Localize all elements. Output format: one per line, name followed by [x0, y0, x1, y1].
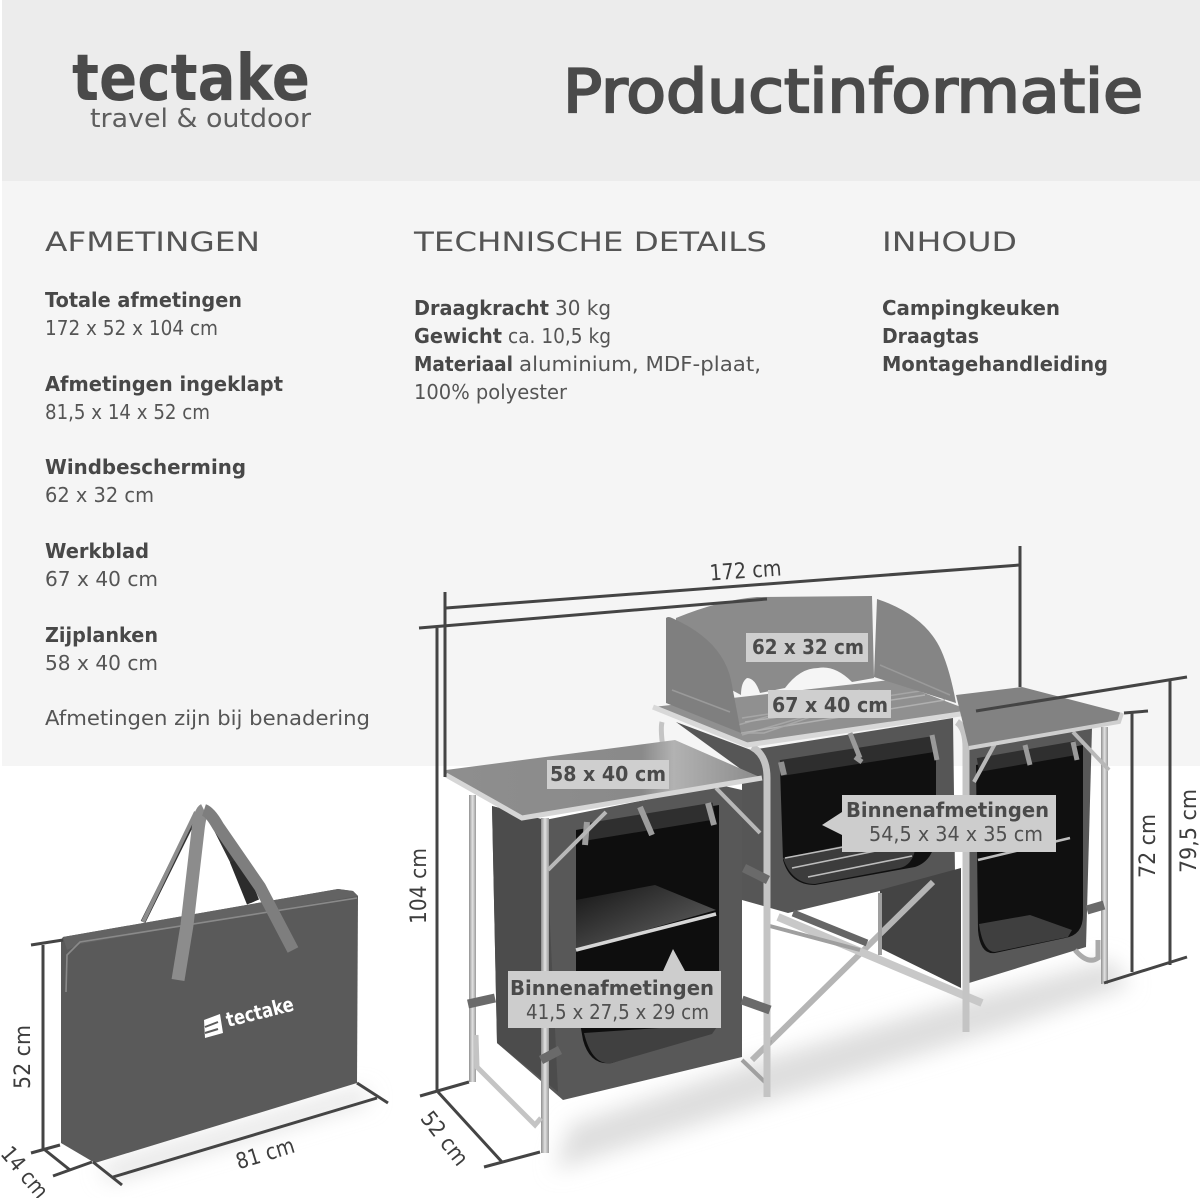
bag top side [63, 889, 358, 950]
text block: dimensions list [45, 288, 370, 730]
handle front [143, 810, 293, 980]
title: Productinformatie [563, 57, 1143, 127]
dimension label: bag height 52 cm: 52 cm [11, 1025, 36, 1089]
information panel background [2, 181, 1200, 766]
dimension label: 104 cm: 104 cm [407, 848, 432, 924]
product illustration: carrying bag [61, 810, 372, 1180]
dimension label: 172 cm: 172 cm [709, 557, 782, 586]
zipper [66, 898, 357, 992]
text block: technical details [414, 296, 761, 404]
text block: dimensions list: 81,5 x 14 x 52 cm [45, 400, 210, 424]
callout: 58 x 40 cm: 58 x 40 cm [550, 762, 666, 786]
text block: dimensions list: Afmetingen ingeklapt [45, 372, 283, 396]
bag shadow [100, 1090, 372, 1180]
text block: contents [882, 296, 1108, 376]
frame poles and cross legs [468, 722, 1109, 1153]
text block: dimensions list: 67 x 40 cm [45, 567, 158, 591]
dimension lines: kitchen [419, 546, 1187, 1167]
text block: technical details: 100% polyester [414, 380, 568, 404]
callout: center compartment inner dimensions [822, 795, 1056, 852]
section: inhoud [882, 227, 1108, 376]
text block: dimensions list: 172 x 52 x 104 cm [45, 316, 218, 340]
dimension label: bag width 81 cm: 81 cm [233, 1134, 298, 1175]
text block: technical details: Draagkracht [414, 296, 549, 320]
floor shadow [555, 960, 1130, 1170]
text block: technical details: aluminium, MDF-plaat, [519, 352, 761, 376]
dimension label: kitchen depth 52 cm: 52 cm [415, 1107, 473, 1171]
right cabinet [880, 728, 1092, 988]
left cabinet [492, 785, 742, 1100]
bag logo: tectake [223, 992, 296, 1032]
section: technische details [413, 227, 767, 404]
callout: center compartment inner dimensions: 54,5 x 34 x 35 cm [869, 822, 1043, 846]
heading: afmetingen: AFMETINGEN [45, 227, 260, 258]
callout: 67 x 40 cm: 67 x 40 cm [772, 693, 888, 717]
bag logo [204, 992, 296, 1038]
right side shelf [956, 687, 1122, 748]
handle back [143, 813, 253, 922]
callout: left compartment inner dimensions: Binnenafmetingen [510, 976, 714, 1000]
brand logo: travel & outdoor [90, 104, 311, 134]
text block: dimensions list: 58 x 40 cm [45, 651, 158, 675]
dimension label: 72 cm: 72 cm [1136, 814, 1161, 878]
center cabinet [676, 718, 955, 913]
text block: contents: Campingkeuken [882, 296, 1060, 320]
bag body [61, 889, 358, 1163]
text block: dimensions list: Zijplanken [45, 623, 158, 647]
callout: left compartment inner dimensions: 41,5 x 27,5 x 29 cm [526, 1000, 709, 1024]
text block: technical details: Gewicht [414, 324, 502, 348]
heading: inhoud: INHOUD [882, 227, 1017, 258]
text block: technical details: Materiaal [414, 352, 513, 376]
text block: technical details: 30 kg [555, 296, 611, 320]
text block: contents: Montagehandleiding [882, 352, 1108, 376]
dimension lines: bag [31, 940, 388, 1185]
heading: technische details: TECHNISCHE DETAILS [413, 227, 767, 258]
product illustration: camping kitchen [446, 596, 1130, 1170]
text block: contents: Draagtas [882, 324, 979, 348]
text block: dimensions list: Windbescherming [45, 455, 246, 479]
text block: dimensions list: Afmetingen zijn bij benadering [45, 706, 370, 730]
text block: dimensions list: Totale afmetingen [45, 288, 242, 312]
brand logo: tectake [72, 42, 310, 116]
header band [2, 0, 1200, 181]
text block: dimensions list: Werkblad [45, 539, 149, 563]
section: afmetingen [45, 227, 370, 730]
text block: dimensions list: 62 x 32 cm [45, 483, 154, 507]
work top [653, 680, 974, 746]
callout: left compartment inner dimensions [508, 949, 721, 1028]
wind screen [666, 596, 956, 733]
callout: 62 x 32 cm: 62 x 32 cm [752, 635, 864, 659]
text block: technical details: ca. 10,5 kg [508, 324, 611, 348]
left side shelf [446, 740, 762, 818]
callout: center compartment inner dimensions: Binnenafmetingen [846, 798, 1049, 822]
